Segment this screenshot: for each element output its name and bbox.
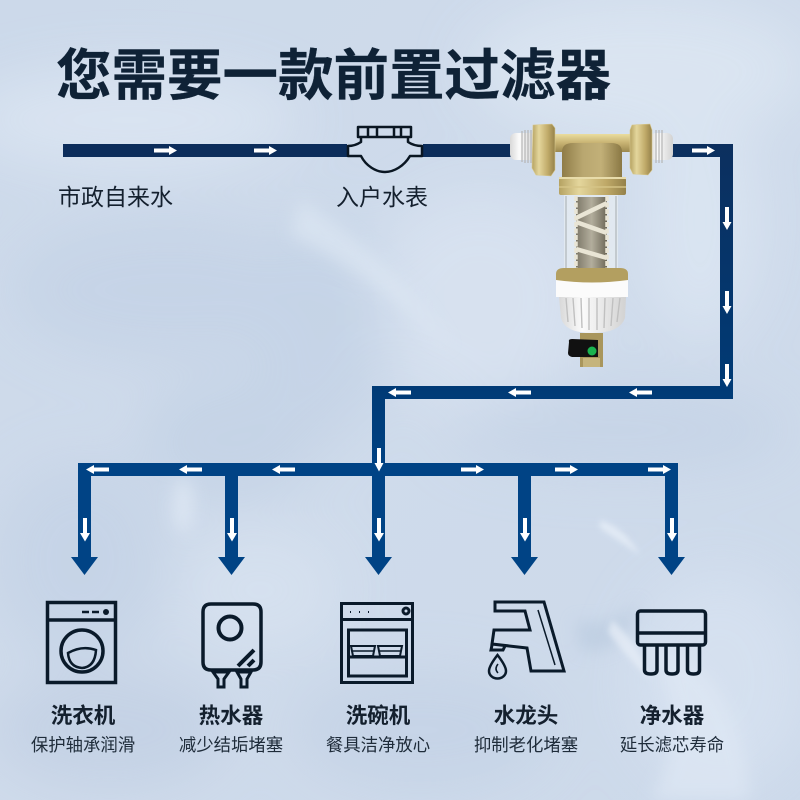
card text: water heater: [179, 704, 283, 754]
card text: water purifier: 延长滤芯寿命: [620, 734, 724, 754]
transparent cup and mesh cartridge: [564, 195, 618, 269]
white bottom cap: [556, 280, 628, 297]
filter product: [510, 124, 673, 367]
pipe: distribution manifold and branches: [71, 463, 685, 575]
flow arrows: [80, 146, 732, 542]
title: 您需要一款前置过滤器: [56, 45, 611, 107]
brass T-body: [553, 134, 631, 152]
card text: faucet: 抑制老化堵塞: [474, 734, 578, 754]
icon: water meter: [348, 127, 422, 172]
card text: washing machine: 洗衣机: [51, 704, 115, 728]
label: water meter: 入户水表: [336, 184, 428, 210]
card text: water heater: 减少结垢堵塞: [179, 734, 283, 754]
drain valve: [580, 333, 603, 367]
card text: water purifier: [620, 704, 724, 754]
card text: faucet: [474, 704, 578, 754]
card text: water purifier: 净水器: [640, 704, 704, 728]
pipe: supply line to filter: [63, 144, 515, 157]
brass collar: [556, 268, 628, 283]
card text: water heater: 热水器: [199, 704, 263, 728]
left and right white couplings: [510, 133, 536, 160]
label: municipal water: 市政自来水: [58, 184, 173, 210]
card text: dishwasher: 洗碗机: [346, 704, 410, 728]
icon: faucet: [489, 602, 564, 679]
icon: washing machine: [47, 602, 116, 682]
card text: dishwasher: 餐具洁净放心: [326, 734, 430, 754]
card text: washing machine: 保护轴承润滑: [31, 734, 135, 754]
card text: dishwasher: [326, 704, 430, 754]
icon: dishwasher: [341, 604, 413, 682]
icon: water heater: [203, 604, 261, 687]
icon: water purifier: [637, 611, 706, 674]
pipe: filter outlet to branch: [372, 144, 733, 470]
card text: washing machine: [31, 704, 135, 754]
card text: faucet: 水龙头: [494, 704, 558, 728]
